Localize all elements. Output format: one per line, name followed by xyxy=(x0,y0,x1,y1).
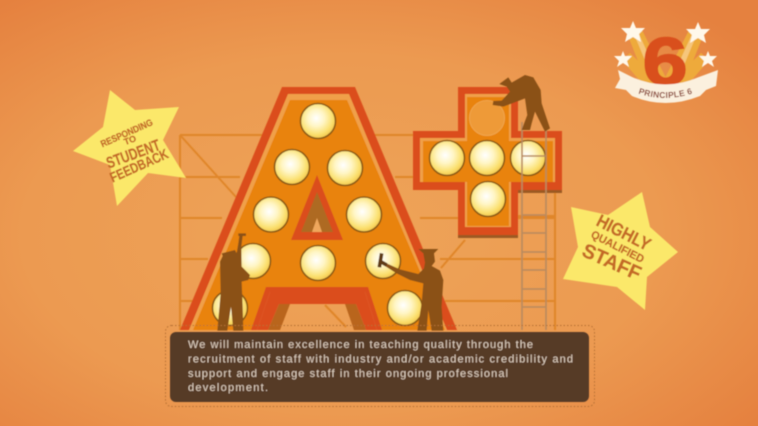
plus light bulbs xyxy=(430,140,546,216)
plus red outline xyxy=(413,87,562,235)
caption text xyxy=(188,339,573,394)
star label text: TO xyxy=(122,133,137,147)
star label text: STUDENT xyxy=(104,137,163,172)
principle 6 badge xyxy=(614,20,719,104)
worker on plus sign xyxy=(493,75,550,132)
plus shadow xyxy=(413,188,562,238)
star label text: QUALIFIED xyxy=(589,229,646,266)
letter A orange face xyxy=(193,100,445,330)
star label text xyxy=(99,117,171,185)
scaffolding xyxy=(180,135,555,330)
star label text: HIGHLY xyxy=(593,211,654,255)
star label text: STAFF xyxy=(579,240,644,285)
star: responding to student feedback xyxy=(73,90,186,206)
star label text: RESPONDING xyxy=(99,117,155,150)
A crossbar outline xyxy=(257,292,377,330)
letter A pale inline xyxy=(189,94,447,330)
worker with mortarboard and hammer xyxy=(379,249,443,331)
plus orange face xyxy=(423,97,553,226)
badge ray highlights xyxy=(634,32,697,82)
badge rays xyxy=(622,30,709,88)
letter A red outline xyxy=(180,87,457,330)
caption panel xyxy=(170,332,589,402)
plus sign xyxy=(413,87,562,238)
star: highly qualified staff xyxy=(563,192,678,310)
star label text: FEEDBACK xyxy=(107,146,171,185)
letter A xyxy=(180,87,457,330)
caption text: development. xyxy=(188,382,268,394)
A counter shadow xyxy=(268,304,366,330)
worker with raised hammer xyxy=(217,233,250,331)
caption text: We will maintain excellence in teaching quality through the xyxy=(188,339,533,351)
plus pale inline xyxy=(420,94,555,227)
badge ribbon xyxy=(615,70,718,103)
caption text: recruitment of staff with industry and/or academic credibility and xyxy=(188,354,573,366)
badge ribbon label: PRINCIPLE 6 xyxy=(638,88,692,99)
badge numeral 6: 6 xyxy=(642,23,688,99)
ladder xyxy=(522,122,546,330)
A light bulbs xyxy=(212,104,422,326)
unlit bulb xyxy=(470,100,504,136)
caption dotted outline xyxy=(166,326,594,406)
caption text: support and engage staff in their ongoing professional xyxy=(188,368,508,380)
A counter triangle xyxy=(291,175,343,240)
star label text xyxy=(579,211,654,285)
badge stars xyxy=(614,21,717,67)
